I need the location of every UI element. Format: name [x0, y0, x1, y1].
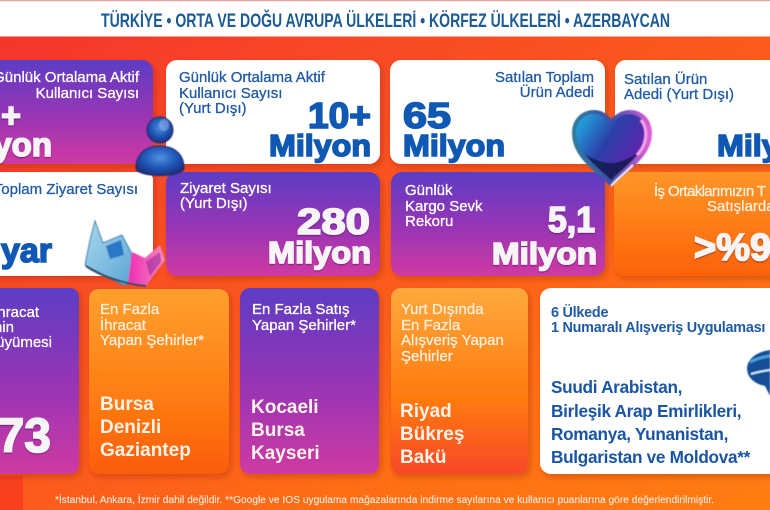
panel: daily cargo record: Kargo Sevk — [405, 198, 483, 215]
panel: visits abroad: (Yurt Dışı) — [180, 195, 248, 212]
panel: top shopping cities abroad: Riyad — [400, 401, 452, 422]
panel: number one shopping app: Suudi Arabistan, — [551, 377, 682, 397]
panel: top selling cities: Yapan Şehirler* — [252, 317, 356, 334]
panel: daily active users abroad: Kullanıcı Sayısı — [179, 85, 282, 102]
panel: top selling cities: En Fazla Satış — [252, 301, 350, 318]
panel: daily active users: + — [1, 97, 21, 135]
icon: crown — [85, 221, 165, 286]
panel: total products sold: 65 — [403, 95, 451, 136]
panel: top exporting cities: Bursa — [100, 394, 154, 415]
panel: total products sold — [390, 60, 605, 164]
panel: daily active users — [0, 60, 153, 164]
panel: number one shopping app: Bulgaristan ve Moldova** — [551, 447, 751, 467]
panel: top selling cities — [240, 288, 379, 474]
panel: top selling cities: Bursa — [251, 420, 305, 441]
panel: top shopping cities abroad — [391, 288, 528, 474]
panel: total products sold: Milyon — [403, 128, 505, 163]
panel: daily cargo record — [391, 172, 605, 276]
panel: top shopping cities abroad: Bükreş — [400, 424, 464, 445]
panel: top shopping cities abroad: Şehirler — [401, 348, 453, 365]
panel: daily cargo record: 5,1 — [548, 199, 595, 240]
panel: daily active users abroad: Günlük Ortalama Aktif — [179, 69, 326, 86]
panel: daily active users abroad: (Yurt Dışı) — [179, 100, 247, 117]
panel: number one shopping app: 1 Numaralı Alışveriş Uygulaması — [551, 320, 765, 336]
panel: partners share of sales: İş Ortaklarımızın T — [654, 182, 766, 200]
panel: top shopping cities abroad: Bakü — [400, 447, 446, 468]
panel: total products sold: Ürün Adedi — [520, 83, 594, 101]
panel: number one shopping app: Birleşik Arap Emirlikleri, — [551, 401, 741, 421]
panel: top selling cities: Kocaeli — [251, 397, 319, 418]
icon: user — [136, 117, 184, 176]
panel: total visits: yar — [1, 232, 52, 270]
header band — [0, 0, 770, 36]
panel: products sold abroad — [615, 60, 770, 164]
panel: products sold abroad: Adedi (Yurt Dışı) — [624, 86, 734, 103]
panel: visits abroad: Milyon — [268, 235, 371, 270]
panel: top exporting cities — [89, 289, 229, 474]
panel: visits abroad — [166, 172, 380, 276]
panel: number one shopping app: Romanya, Yunanistan, — [551, 424, 728, 444]
panel: top exporting cities: İhracat — [100, 316, 147, 334]
panel: partners share of sales: >%9 — [694, 227, 770, 269]
panel: top shopping cities abroad: En Fazla — [401, 317, 461, 334]
panel: number one shopping app — [540, 288, 770, 474]
panel: top selling cities: Kayseri — [251, 443, 320, 464]
panel: daily cargo record: Milyon — [492, 236, 597, 271]
panel: products sold abroad: Satılan Ürün — [624, 70, 707, 88]
panel: partners share of sales — [614, 172, 770, 276]
panel: daily active users abroad — [166, 60, 380, 164]
panel: visits abroad: 280 — [297, 201, 370, 242]
panel: daily cargo record: Günlük — [405, 182, 453, 199]
panel: top exporting cities: Yapan Şehirler* — [100, 332, 204, 349]
panel: top exporting cities: Denizli — [100, 417, 161, 438]
panel: daily active users abroad: 10+ — [308, 95, 371, 136]
panel: top exporting cities: Gaziantep — [100, 440, 191, 461]
panel: number one shopping app: 6 Ülkede — [551, 304, 608, 321]
panel: top shopping cities abroad: Alışveriş Yapan — [401, 332, 504, 349]
icon: metallic object — [747, 350, 770, 396]
panel: daily active users: Kullanıcı Sayısı — [36, 85, 139, 102]
icon: heart — [572, 110, 652, 187]
panel: top shopping cities abroad: Yurt Dışında — [401, 301, 484, 318]
panel: export growth — [0, 288, 79, 474]
panel: visits abroad: Ziyaret Sayısı — [180, 180, 272, 197]
panel: daily active users abroad: Milyon — [269, 128, 371, 163]
panel: total products sold: Satılan Toplam — [495, 69, 594, 86]
panel: top exporting cities: En Fazla — [100, 301, 160, 318]
panel: total visits — [0, 172, 153, 276]
panel: daily cargo record: Rekoru — [405, 213, 453, 230]
footnote: *İstanbul, Ankara, İzmir dahil değildir. **Google ve IOS uygulama mağazalarında indirme sayılarına ve kullanıcı puanlarına göre değerlendirilmiştir. — [55, 493, 714, 506]
